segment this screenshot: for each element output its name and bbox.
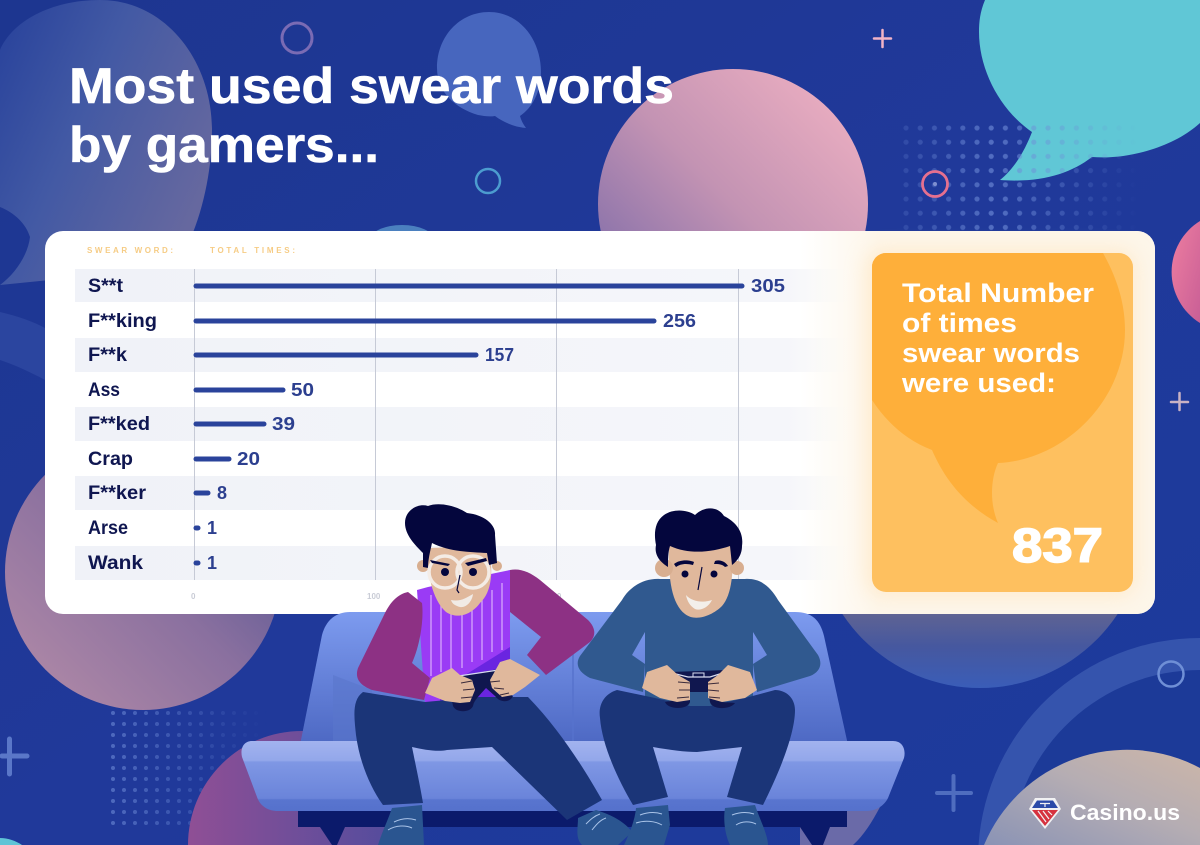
logo: Casino.us bbox=[1029, 798, 1180, 829]
plus: right bbox=[1171, 393, 1188, 410]
bar values: 39 bbox=[272, 414, 295, 434]
left gamer head bbox=[428, 546, 491, 616]
sofa backrest bbox=[300, 612, 848, 745]
sofa seat bbox=[241, 741, 905, 811]
bar values: 1 bbox=[207, 553, 217, 573]
circle: right blue bbox=[815, 358, 1145, 688]
bar values: 305 bbox=[751, 276, 785, 296]
callout text: swear words bbox=[902, 338, 1080, 368]
panel: total callout bbox=[860, 240, 1136, 596]
plus: left bbox=[2, 739, 27, 774]
row labels: Arse bbox=[88, 518, 128, 539]
title bbox=[69, 58, 674, 173]
sofa bbox=[241, 612, 905, 845]
row labels: F**ker bbox=[88, 483, 147, 504]
row labels: F**king bbox=[88, 311, 157, 332]
vest stripes bbox=[431, 583, 502, 676]
axis labels: 0 bbox=[191, 592, 196, 601]
left gamer glasses bbox=[429, 556, 489, 588]
right gamer controller bbox=[665, 670, 735, 708]
row labels: Crap bbox=[88, 449, 133, 470]
row labels: Wank bbox=[88, 553, 143, 574]
title: Most used swear words bbox=[69, 58, 674, 114]
circle: teal behind card bbox=[370, 225, 434, 255]
title: by gamers... bbox=[69, 117, 379, 173]
bar values: 20 bbox=[237, 449, 260, 469]
plus: bottom bbox=[937, 776, 971, 810]
ring: inner bbox=[1011, 670, 1200, 845]
grid lines bbox=[194, 269, 738, 580]
right gamer shoes bbox=[624, 805, 768, 845]
left gamer face details bbox=[430, 558, 487, 576]
bar values: 50 bbox=[291, 380, 314, 400]
circle: pink edge bbox=[1172, 221, 1200, 323]
left gamer vest bbox=[417, 570, 510, 702]
right gamer hair bbox=[655, 508, 742, 567]
bubble: teal bbox=[979, 0, 1200, 181]
ring: bottom right bbox=[978, 638, 1200, 845]
cushion seam bbox=[572, 620, 574, 745]
left gamer hands bbox=[425, 659, 540, 703]
right gamer hands bbox=[642, 665, 757, 702]
table rows bbox=[75, 269, 850, 580]
callout background bbox=[872, 253, 1133, 592]
callout text: Total Number bbox=[902, 278, 1095, 308]
circle: left mauve bbox=[5, 434, 281, 710]
row labels: Ass bbox=[88, 380, 120, 401]
vest dark fold bbox=[440, 647, 510, 702]
bar values: 8 bbox=[217, 483, 227, 503]
character: left gamer bbox=[354, 504, 632, 845]
row labels: F**ked bbox=[88, 414, 150, 435]
dot pattern: top right bbox=[904, 126, 1107, 230]
right gamer head bbox=[669, 545, 733, 618]
row labels: S**t bbox=[88, 276, 124, 297]
callout text: of times bbox=[902, 308, 1017, 338]
shape: behind sofa right bbox=[800, 807, 880, 845]
bar values: 1 bbox=[207, 518, 217, 538]
left gamer shoe laces bbox=[388, 814, 606, 830]
dot pattern: bottom left bbox=[111, 711, 236, 825]
bar values: 157 bbox=[485, 345, 514, 365]
axis labels bbox=[191, 592, 562, 601]
left gamer arm left bbox=[357, 592, 430, 700]
plus: top bbox=[874, 30, 891, 47]
band: left edge bbox=[0, 312, 45, 380]
callout speech bubble bbox=[860, 240, 1125, 523]
callout text bbox=[901, 278, 1095, 398]
column headers: SWEAR WORD: bbox=[87, 246, 173, 255]
total number: 837 bbox=[1012, 520, 1103, 573]
circle: pink bbox=[598, 69, 868, 339]
ring: mauve bbox=[282, 23, 312, 53]
left gamer controller bbox=[448, 667, 513, 711]
circle: bottom right beige bbox=[984, 750, 1200, 845]
logo icon bbox=[1029, 798, 1061, 829]
left gamer arm right bbox=[510, 569, 594, 675]
bar chart bbox=[196, 286, 742, 563]
bar values bbox=[207, 276, 785, 573]
cushion shade bbox=[333, 675, 372, 741]
logo text: Casino.us bbox=[1070, 800, 1180, 825]
right gamer face details bbox=[674, 560, 728, 578]
left gamer smile bbox=[451, 594, 473, 607]
left gamer hair bbox=[405, 504, 497, 568]
column headers: TOTAL TIMES: bbox=[210, 246, 295, 255]
column headers bbox=[87, 246, 295, 255]
circle: bottom mauve bbox=[188, 731, 416, 845]
callout text: were used: bbox=[901, 368, 1056, 398]
bubble: top left bbox=[0, 0, 212, 285]
ring: teal bbox=[476, 169, 500, 193]
ring: pink bbox=[922, 172, 948, 196]
ring: blue right bbox=[1158, 662, 1184, 686]
bubble: blue bbox=[437, 12, 541, 128]
axis labels: 100 bbox=[367, 592, 381, 601]
row labels: F**k bbox=[88, 345, 127, 366]
card tint bbox=[800, 231, 1155, 614]
right gamer legs bbox=[600, 690, 795, 805]
bar values: 256 bbox=[663, 311, 696, 331]
right gamer sweater bbox=[578, 579, 820, 708]
callout glow bbox=[866, 250, 1136, 596]
left gamer legs bbox=[354, 692, 602, 820]
sofa base bbox=[298, 810, 847, 845]
left gamer shoes bbox=[378, 805, 632, 845]
axis labels: 200 bbox=[548, 592, 562, 601]
circle: bottom left teal bbox=[0, 838, 22, 845]
character: right gamer bbox=[578, 508, 820, 845]
row labels bbox=[88, 276, 157, 574]
right gamer shoe laces bbox=[636, 813, 756, 825]
panel: chart card bbox=[45, 231, 1155, 614]
right gamer smile bbox=[686, 595, 712, 610]
